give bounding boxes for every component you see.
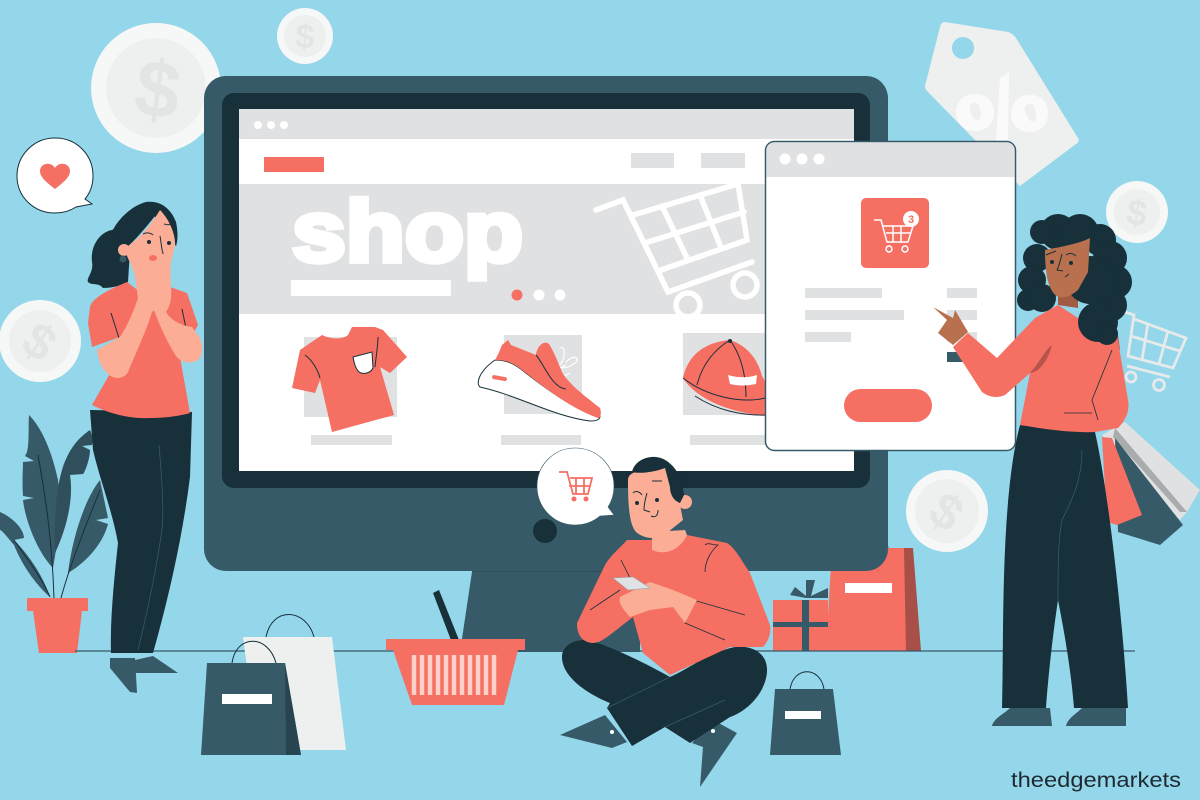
icon: small dollar coin top bbox=[277, 8, 333, 64]
hair bbox=[632, 457, 684, 503]
crossed legs bbox=[562, 640, 767, 746]
pants bbox=[1002, 425, 1128, 708]
shirt bbox=[88, 282, 198, 418]
monitor stand bbox=[460, 565, 640, 652]
product: sneaker bbox=[478, 335, 601, 445]
icon: right small dollar coin: $ bbox=[1124, 191, 1150, 234]
hair curls bbox=[1017, 214, 1132, 345]
hand pointing bbox=[933, 307, 968, 345]
icon: cart badge: 3 bbox=[908, 214, 914, 226]
ponytail and hair bbox=[88, 202, 178, 288]
icon: percent price tag bbox=[925, 22, 1079, 186]
shopping bag label bbox=[845, 583, 892, 593]
speech bubble: heart bbox=[17, 138, 93, 213]
person: surprised woman bbox=[88, 202, 202, 693]
shoes bbox=[992, 708, 1052, 726]
hands bbox=[620, 582, 697, 623]
flower pot bbox=[27, 598, 88, 653]
neck bbox=[652, 530, 687, 552]
webcam button bbox=[533, 519, 557, 543]
shopping bag: white bbox=[243, 614, 346, 750]
face bbox=[127, 210, 175, 288]
shopping basket bbox=[386, 590, 525, 705]
speech bubble: cart bbox=[537, 448, 614, 525]
icon: plant bbox=[0, 415, 108, 653]
icon: left dollar coin: $ bbox=[12, 311, 67, 373]
facial features bbox=[143, 224, 171, 261]
facial features bbox=[1046, 251, 1076, 277]
icon: small dollar coin top: $ bbox=[294, 17, 316, 57]
shopping bag: coral bbox=[826, 528, 921, 651]
neck bbox=[1058, 286, 1078, 308]
phone bbox=[613, 577, 650, 590]
browser top bar bbox=[239, 109, 854, 139]
sweater bbox=[577, 535, 770, 675]
sweater and arm bbox=[953, 305, 1129, 432]
icon: large dollar coin bbox=[91, 23, 221, 153]
icon: lower right dollar coin bbox=[906, 470, 988, 552]
popup checkout window bbox=[766, 142, 1016, 450]
icon: outlined cart right bbox=[1122, 311, 1186, 390]
arm and hand left bbox=[97, 260, 171, 378]
navigation bar bbox=[264, 153, 745, 172]
plant leaves bbox=[0, 415, 108, 597]
hero banner: shop bbox=[292, 184, 523, 280]
shopping bag: dark left bbox=[201, 641, 301, 755]
hero banner bbox=[239, 184, 854, 314]
product: t-shirt bbox=[292, 327, 407, 445]
checkout button bbox=[844, 389, 932, 422]
shoes bbox=[135, 656, 178, 673]
product: cap bbox=[683, 333, 770, 445]
watermark: theedgemarkets bbox=[1011, 768, 1181, 792]
pants bbox=[90, 410, 192, 653]
monitor bbox=[204, 76, 888, 652]
order text lines bbox=[805, 288, 977, 362]
floor line bbox=[75, 650, 1135, 652]
person: seated man with phone bbox=[560, 457, 770, 787]
shopping bags bbox=[1102, 422, 1200, 545]
shopping bag: small dark bbox=[770, 672, 841, 755]
icon: left dollar coin bbox=[0, 300, 81, 382]
icon: banner shopping cart bbox=[596, 184, 757, 317]
person: standing woman pointing bbox=[933, 214, 1200, 726]
gift box bbox=[773, 580, 828, 651]
icon: lower right dollar coin: $ bbox=[919, 481, 974, 543]
face bbox=[1045, 238, 1090, 297]
shoes bbox=[560, 715, 627, 748]
icon: cart badge bbox=[861, 198, 929, 268]
face bbox=[628, 467, 683, 538]
icon: right small dollar coin bbox=[1106, 181, 1168, 243]
facial features bbox=[633, 481, 662, 517]
icon: large dollar coin: $ bbox=[130, 42, 186, 137]
shirt shadow bbox=[1078, 320, 1120, 350]
arm right bbox=[153, 285, 202, 362]
